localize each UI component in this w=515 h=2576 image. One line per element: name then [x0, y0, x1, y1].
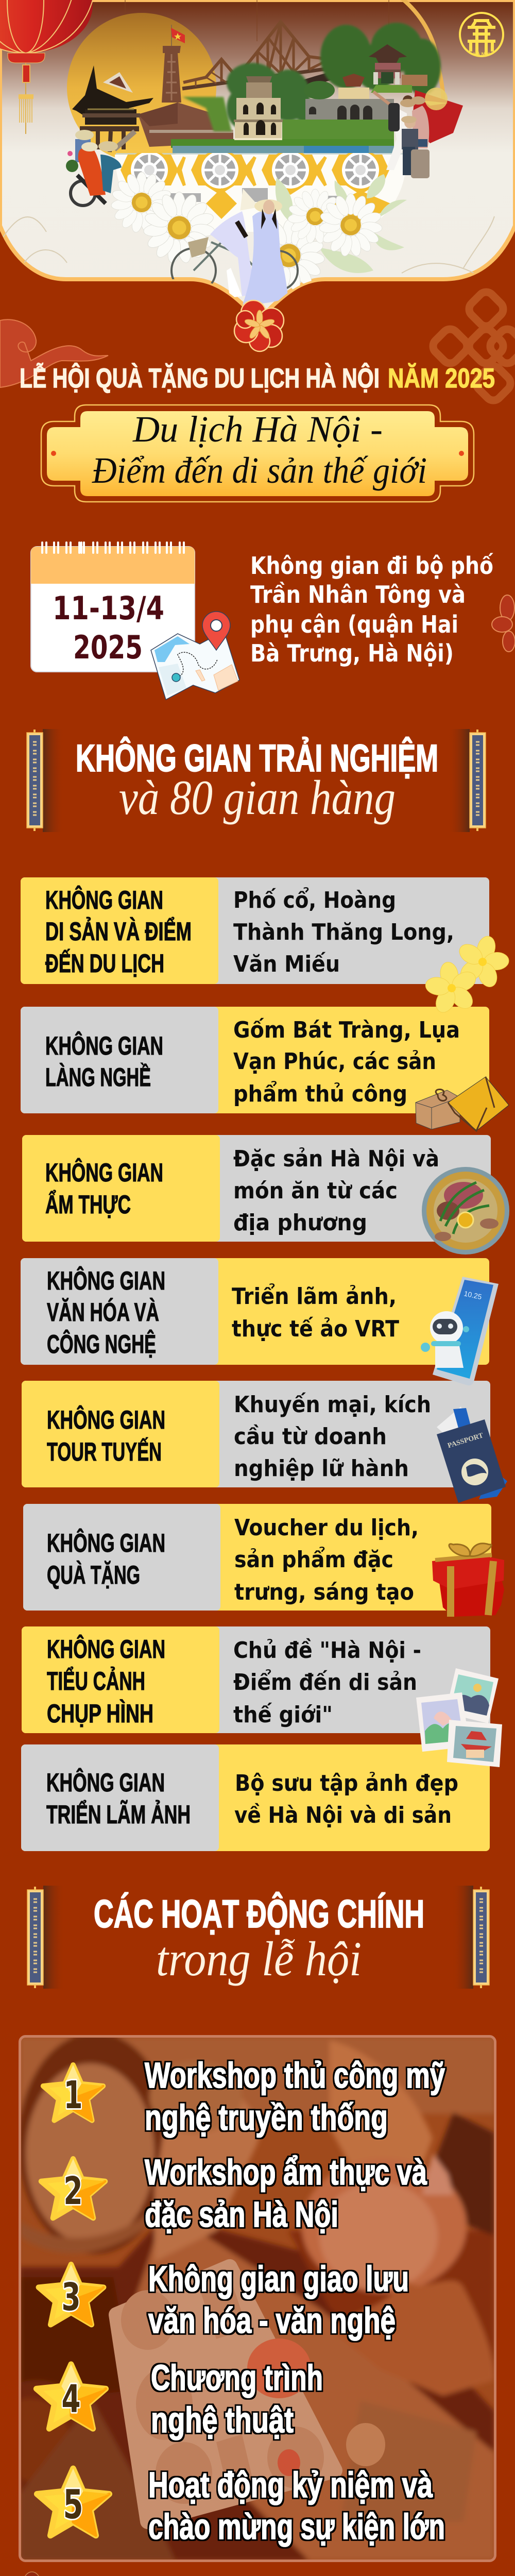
row 8: photo exhibition: Bộ sưu tập ảnh đẹp — [235, 1770, 458, 1797]
row 5: tours: Khuyến mại, kích — [234, 1392, 431, 1418]
row 7: photo scenes: Chủ đề "Hà Nội - — [233, 1637, 421, 1664]
row 8: photo exhibition: về Hà Nội và di sản — [234, 1802, 452, 1828]
row 2: craft villages — [21, 1007, 489, 1113]
activity 2: Workshop ẩm thực và — [145, 2152, 427, 2192]
row 1: heritage: Thành Thăng Long, — [233, 919, 454, 945]
banner: theme — [41, 405, 474, 502]
row 1: heritage: DI SẢN VÀ ĐIỂM — [45, 917, 192, 946]
imperial citadel gate and wall — [304, 74, 412, 120]
lantern top left — [0, 0, 93, 134]
palette — [116, 2267, 335, 2521]
fort base — [138, 103, 233, 147]
icon: pho bowl — [422, 1167, 509, 1255]
banner script text: Điểm đến di sản thế giới — [92, 450, 427, 491]
activity 1: nghệ truyền thống — [145, 2097, 388, 2138]
icon: passport and boarding pass: PASSPORT — [447, 1432, 485, 1450]
decoration: endless knot right — [430, 289, 515, 404]
location text: Bà Trưng, Hà Nội) — [250, 639, 454, 667]
row 1: heritage — [21, 877, 489, 984]
row 5: tours — [22, 1381, 490, 1487]
activity 4: 4 — [61, 2377, 81, 2421]
row 3: cuisine — [22, 1135, 491, 1242]
brush frame top right — [401, 0, 445, 100]
location text: Trần Nhân Tông và — [250, 581, 466, 608]
row 8: photo exhibition — [21, 1744, 490, 1851]
icon: red gift box — [432, 1544, 504, 1617]
row 2: craft villages: Gốm Bát Tràng, Lụa — [233, 1017, 460, 1043]
Long Bien bridge — [182, 22, 340, 89]
row 5: tours: TOUR TUYẾN — [47, 1437, 162, 1466]
row 2: craft villages: LÀNG NGHỀ — [45, 1063, 151, 1092]
row 2: craft villages: phẩm thủ công — [233, 1080, 407, 1107]
row 7: photo scenes: TIỂU CẢNH — [47, 1667, 145, 1696]
icon: map with pin — [151, 612, 239, 700]
activity 4: nghệ thuật — [151, 2400, 294, 2440]
flag tower — [162, 25, 185, 103]
activity 2: 2 — [63, 2169, 83, 2213]
row 7: photo scenes: thế giới" — [233, 1702, 333, 1728]
row 5: tours: nghiệp lữ hành — [234, 1455, 409, 1482]
middle tree — [227, 63, 314, 129]
activity 1 — [43, 2055, 445, 2138]
yellow sun disc — [67, 13, 216, 162]
footer — [0, 2572, 515, 2576]
activity 5 — [37, 2465, 445, 2547]
activity 2: đặc sản Hà Nội — [145, 2194, 338, 2234]
icon: red plum flower — [234, 300, 284, 351]
row 1: heritage: ĐẾN DU LỊCH — [45, 949, 164, 978]
water — [173, 146, 394, 154]
row 4: culture and technology: VĂN HÓA VÀ — [47, 1298, 159, 1327]
decoration: cloud swirl left — [0, 319, 108, 387]
cyclo riders — [66, 130, 122, 206]
row 6: gifts: trưng, sáng tạo — [234, 1579, 414, 1605]
ao dai girls on bicycle — [171, 185, 298, 306]
row 6: gifts: Voucher du lịch, — [234, 1515, 419, 1541]
heading text: và 80 gian hàng — [119, 770, 396, 825]
green lawn — [282, 120, 394, 141]
activity 4 — [36, 2358, 323, 2440]
icon: passport and boarding pass — [437, 1406, 507, 1503]
row 4: culture and technology — [21, 1258, 489, 1365]
tourist family and gift box — [373, 88, 463, 178]
hero scene — [0, 0, 494, 306]
icon: craft gift boxes — [416, 1077, 509, 1131]
row 3: cuisine: KHÔNG GIAN — [45, 1158, 163, 1187]
row 4: culture and technology: thực tế ảo VRT — [232, 1316, 399, 1342]
activity 3: văn hóa - văn nghệ — [148, 2300, 396, 2341]
title: LỄ HỘI QUÀ TẶNG DU LỊCH HÀ NỘI — [20, 362, 380, 394]
row 5: tours: KHÔNG GIAN — [47, 1405, 165, 1434]
temple of literature pavilion — [369, 44, 427, 86]
date — [53, 589, 164, 666]
activity 1: 1 — [63, 2073, 83, 2117]
icon: phone and robot: 10.25 — [463, 1289, 483, 1301]
row 4: culture and technology: KHÔNG GIAN — [47, 1266, 165, 1295]
activity 3: Không gian giao lưu — [148, 2259, 409, 2299]
banner script text: Du lịch Hà Nội - — [132, 409, 383, 450]
row 1: heritage: Phố cổ, Hoàng — [233, 887, 396, 913]
row 7: photo scenes — [22, 1626, 490, 1733]
row 6: gifts: KHÔNG GIAN — [47, 1528, 165, 1557]
icon: photo cards — [416, 1668, 502, 1767]
hero background frame — [0, 0, 515, 319]
calendar — [31, 543, 195, 672]
row 5: tours: cầu từ doanh — [234, 1423, 387, 1450]
activity 5: 5 — [63, 2482, 83, 2529]
fields behind — [182, 97, 232, 131]
footer flower — [2, 2572, 62, 2576]
row 6: gifts: QUÀ TẶNG — [47, 1561, 140, 1589]
icon: phone and robot — [421, 1277, 499, 1385]
row 1: heritage: Văn Miếu — [233, 951, 340, 977]
row 3: cuisine: địa phương — [233, 1210, 367, 1236]
heading text: trong lễ hội — [156, 1931, 362, 1986]
row 4: culture and technology: Triển lãm ảnh, — [232, 1283, 397, 1310]
turtle tower — [234, 76, 283, 140]
row 7: photo scenes: CHỤP HÌNH — [47, 1699, 153, 1728]
date: 11-13/4 — [53, 589, 164, 627]
location text: phụ cận (quận Hai — [250, 611, 458, 638]
row 8: photo exhibition: KHÔNG GIAN — [46, 1768, 165, 1797]
heading text — [94, 1892, 424, 1986]
one pillar pagoda — [72, 65, 153, 152]
pale leaves — [276, 174, 407, 273]
row 1: heritage: KHÔNG GIAN — [45, 885, 163, 914]
logo: Hanoi emblem: HÀ NỘI — [473, 51, 490, 57]
activity 3: 3 — [61, 2275, 81, 2319]
section heading: experience spaces — [27, 729, 486, 832]
decoration: red flower right edge — [492, 595, 515, 652]
trees back — [320, 23, 441, 95]
row 8: photo exhibition: TRIỂN LÃM ẢNH — [46, 1800, 191, 1829]
date: 2025 — [73, 629, 143, 666]
activity 4: Chương trình — [151, 2358, 323, 2398]
location text — [250, 552, 493, 667]
row 3: cuisine: ẨM THỰC — [45, 1190, 131, 1219]
patterned tile band — [115, 145, 407, 232]
activity 5: Hoạt động kỷ niệm và — [148, 2465, 433, 2505]
title: NĂM 2025 — [388, 363, 495, 394]
row 7: photo scenes: KHÔNG GIAN — [47, 1634, 165, 1664]
row 6: gifts — [23, 1504, 491, 1611]
row 6: gifts: sản phẩm đặc — [234, 1546, 393, 1573]
banner script text — [92, 409, 427, 491]
panel photo background — [0, 2032, 495, 2561]
panel: activities — [0, 2032, 495, 2561]
row 7: photo scenes: Điểm đến di sản — [233, 1669, 417, 1696]
activity 3 — [39, 2259, 409, 2341]
hero illustration panel — [0, 0, 515, 319]
row 4: culture and technology: CÔNG NGHỆ — [47, 1329, 156, 1359]
heading text — [76, 737, 438, 825]
daisies — [111, 172, 383, 292]
activity 2 — [41, 2152, 427, 2234]
icon: yellow flowers — [420, 929, 515, 1019]
row 3: cuisine: món ăn từ các — [233, 1178, 398, 1204]
logo: Hanoi emblem — [460, 13, 503, 57]
row 2: craft villages: Vạn Phúc, các sản — [233, 1048, 436, 1075]
row 3: cuisine: Đặc sản Hà Nội và — [233, 1146, 439, 1172]
section heading: main activities — [27, 1886, 489, 1989]
row 2: craft villages: KHÔNG GIAN — [45, 1031, 163, 1060]
